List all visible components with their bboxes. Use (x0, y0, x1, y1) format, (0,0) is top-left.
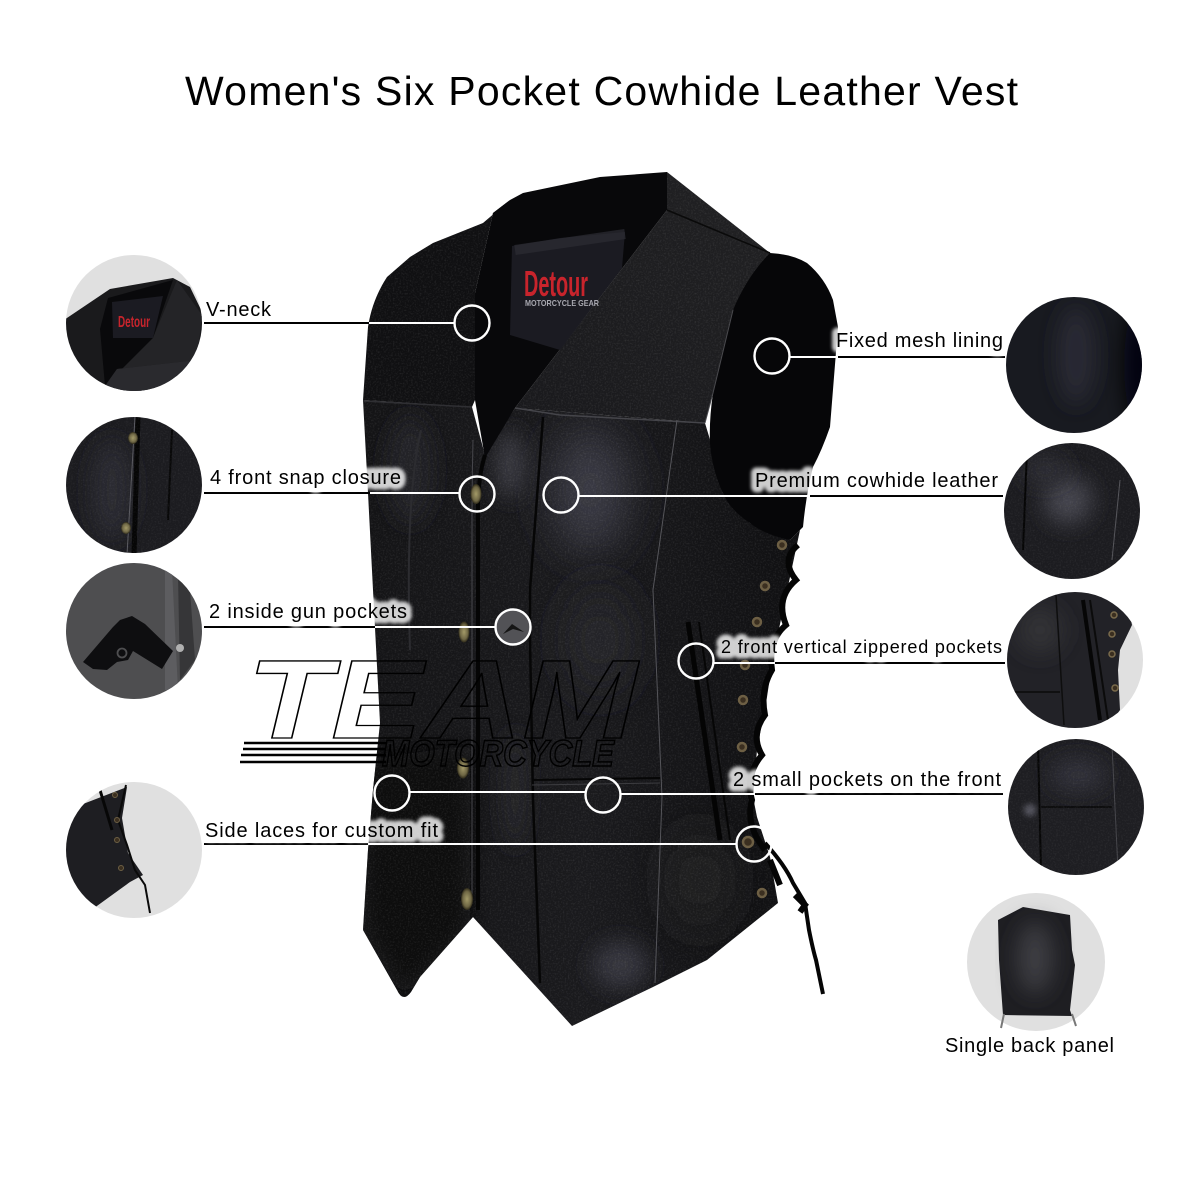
thumbnail: small pockets detail (1006, 737, 1146, 877)
marker: snap closure (460, 476, 494, 512)
inner collar label patch: MOTORCYCLE GEAR (525, 298, 599, 308)
logo wordmark TEAM: TEAM (247, 637, 640, 762)
title: Women's Six Pocket Cowhide Leather Vest (185, 68, 1019, 114)
thumbnail: back panel (967, 893, 1105, 1031)
leather shading (363, 415, 730, 999)
label halos: Fixed mesh lining (836, 330, 1003, 352)
thumbnail: gun pocket detail (64, 561, 204, 701)
label: 4 front snap closure: 4 front snap closure (210, 467, 401, 489)
thumbnail: snap closure detail (64, 415, 204, 555)
vest inner neck lining (475, 172, 667, 458)
zipper (688, 622, 720, 840)
label halos: Side laces for custom fit (205, 820, 438, 842)
vest body front (363, 400, 800, 1026)
label halos: 2 inside gun pockets (209, 601, 407, 623)
gun silhouette (83, 616, 173, 670)
thumbnail: side lace detail (64, 780, 204, 920)
right collar panel (515, 172, 770, 423)
marker: zippered pocket (678, 644, 714, 678)
label: Premium cowhide leather: Premium cowhide leather (755, 470, 998, 492)
seam lines and stitching (363, 210, 770, 983)
vest marker circles (374, 306, 790, 862)
label: 2 small pockets on the front: 2 small pockets on the front (733, 769, 1001, 791)
marker: small pocket left (374, 776, 410, 810)
vest illustration (360, 170, 838, 1030)
logo wordmark MOTORCYCLE: MOTORCYCLE (382, 733, 615, 774)
leather grain overlay (360, 170, 810, 1030)
marker: cowhide leather (544, 478, 578, 512)
vest right armhole mesh lining (710, 253, 838, 540)
thumbnail: zippered pockets detail (1006, 591, 1146, 731)
marker: side lace (736, 826, 772, 862)
marker: V-neck (454, 306, 490, 340)
label halos: 2 small pockets on the front (733, 769, 1001, 791)
left collar panel (363, 200, 510, 407)
label: V-neck: V-neck (206, 299, 272, 321)
label halos (205, 330, 1003, 842)
brass snaps (457, 484, 482, 910)
label halos: 4 front snap closure (210, 467, 401, 489)
vest marker lines (204, 323, 1005, 844)
tassel (765, 843, 823, 994)
lacing eyelets (738, 541, 786, 897)
marker: small pocket right (586, 778, 620, 812)
label: 2 front vertical zippered pockets: 2 front vertical zippered pockets (721, 637, 1002, 657)
thumbnail: V-neck detail (64, 254, 206, 394)
label halos: Premium cowhide leather (755, 470, 998, 492)
label halos: 2 front vertical zippered pockets (721, 637, 1002, 657)
thumbnail leather grain (64, 415, 1146, 877)
watermark logo (240, 637, 640, 774)
label: 2 inside gun pockets: 2 inside gun pockets (209, 601, 407, 623)
marker: mesh lining (754, 338, 790, 374)
thumbnail brand label: Detour (118, 314, 150, 331)
thumbnail: mesh lining detail (1006, 297, 1142, 433)
side lacing (750, 545, 823, 994)
label: Fixed mesh lining: Fixed mesh lining (836, 330, 1003, 352)
inner collar label patch (510, 232, 625, 350)
label: Single back panel: Single back panel (945, 1035, 1114, 1057)
label: Side laces for custom fit: Side laces for custom fit (205, 820, 438, 842)
logo speed stripes (240, 743, 386, 762)
thumbnail: cowhide leather detail (1003, 442, 1143, 582)
marker: gun pocket (496, 610, 530, 644)
Detour brand label: Detour (524, 263, 588, 304)
